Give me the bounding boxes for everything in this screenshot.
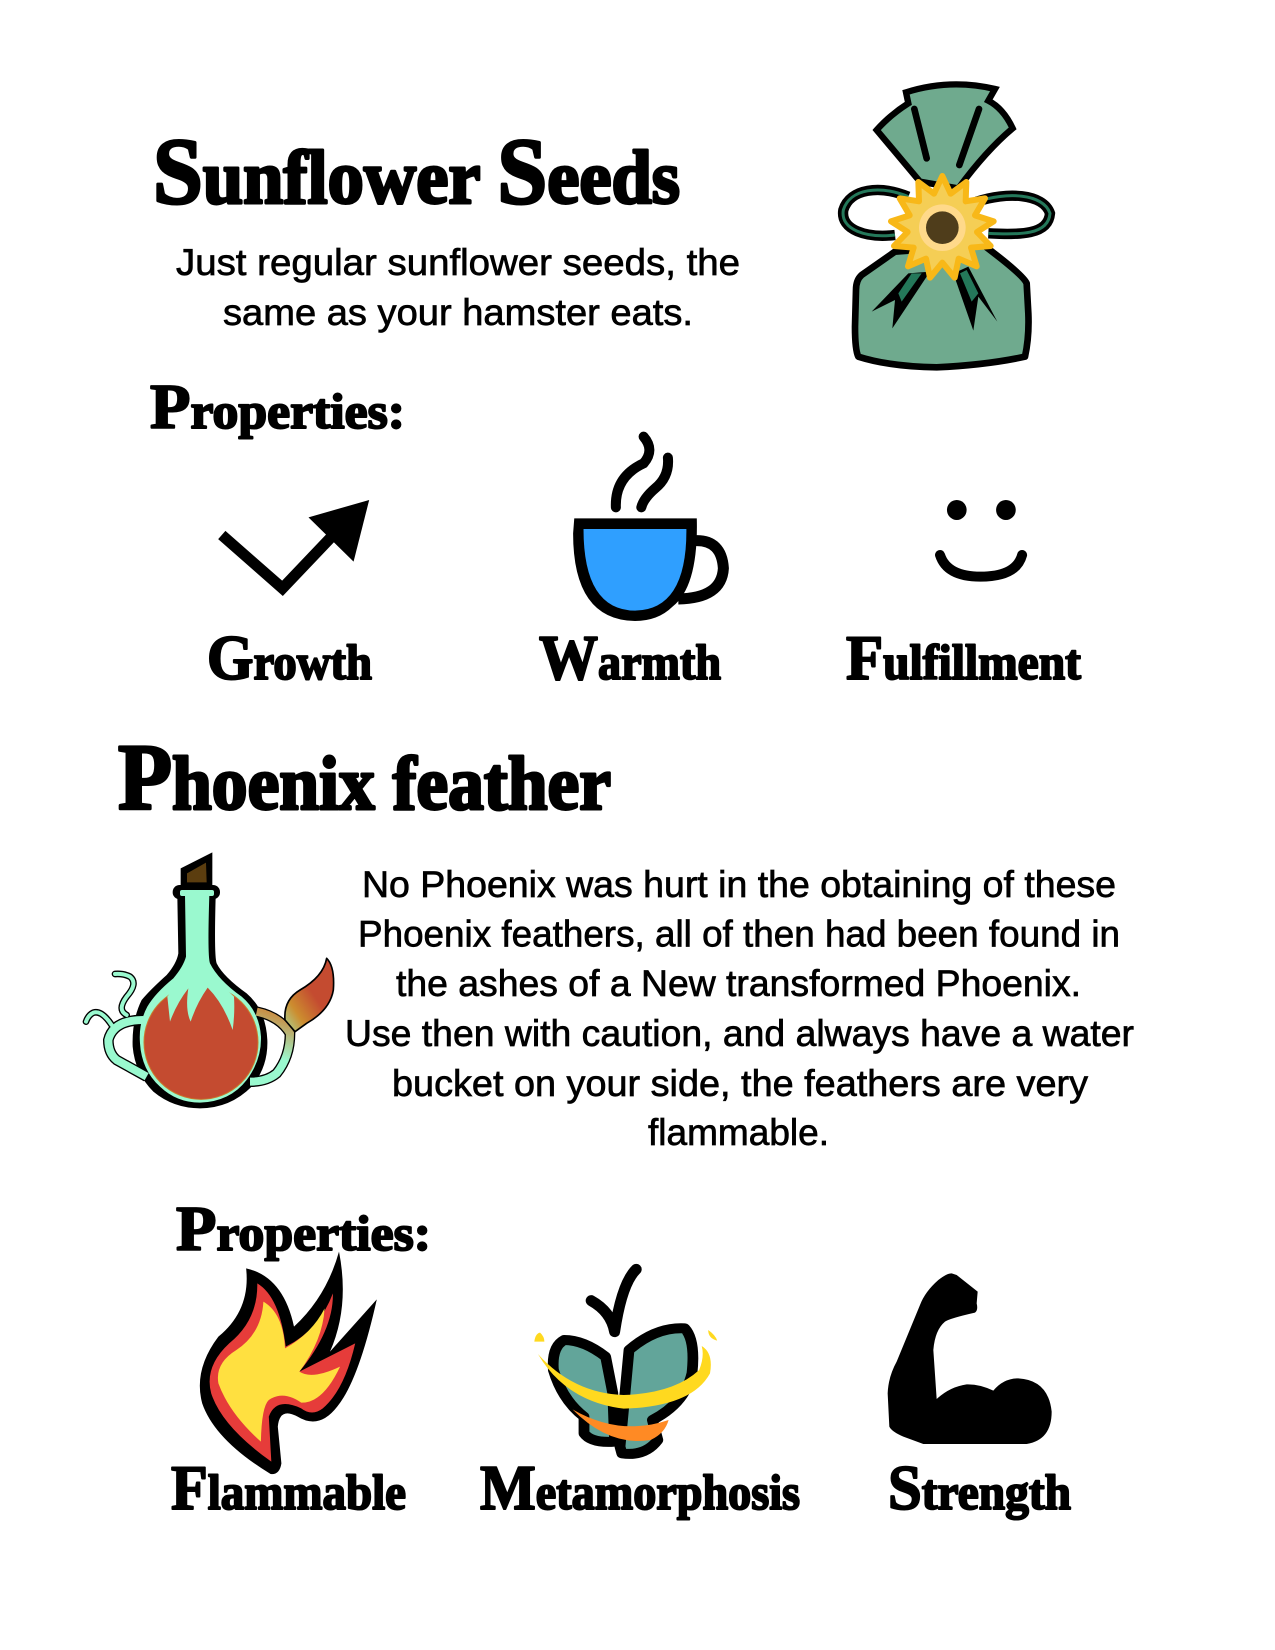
label: Growth: Growth <box>207 622 372 693</box>
icon: butterfly metamorphosis <box>534 1269 717 1454</box>
label: Strength: Strength <box>888 1452 1071 1523</box>
icon: flame <box>200 1252 377 1474</box>
icon: flexed arm <box>888 1273 1052 1444</box>
icon: growth arrow <box>222 500 369 588</box>
text block: sunflower seeds description: Just regular sunflower seeds, the <box>176 242 740 283</box>
text block: phoenix feather description: bucket on your side, the feathers are very <box>392 1063 1089 1104</box>
text block: phoenix feather description: flammable. <box>648 1112 829 1153</box>
text block: phoenix feather description: Phoenix feathers, all of then had been found in <box>358 914 1120 954</box>
text block: sunflower seeds description: same as your hamster eats. <box>223 292 693 333</box>
text block: phoenix feather description: Use then with caution, and always have a water <box>345 1013 1134 1054</box>
text block: phoenix feather description: No Phoenix was hurt in the obtaining of these <box>362 864 1116 905</box>
heading: Properties (phoenix): Properties: <box>176 1193 431 1264</box>
title: Phoenix feather: Phoenix feather <box>118 726 611 830</box>
icon: potion flask with feather <box>86 852 334 1108</box>
heading: Properties (sunflower): Properties: <box>150 371 405 442</box>
text block: phoenix feather description: the ashes of a New transformed Phoenix. <box>396 963 1081 1004</box>
label: Fulfillment: Fulfillment <box>846 622 1081 693</box>
text block: phoenix feather description <box>345 864 1134 1153</box>
text block: sunflower seeds description <box>176 242 740 333</box>
label: Metamorphosis: Metamorphosis <box>480 1452 800 1523</box>
icon: smiley face <box>940 500 1022 577</box>
label: Flammable: Flammable <box>171 1452 406 1523</box>
icon: coffee cup <box>573 437 723 621</box>
label: Warmth: Warmth <box>539 622 721 693</box>
icon: seed bag with sunflower <box>843 84 1050 367</box>
title: Sunflower Seeds: Sunflower Seeds <box>153 120 680 224</box>
